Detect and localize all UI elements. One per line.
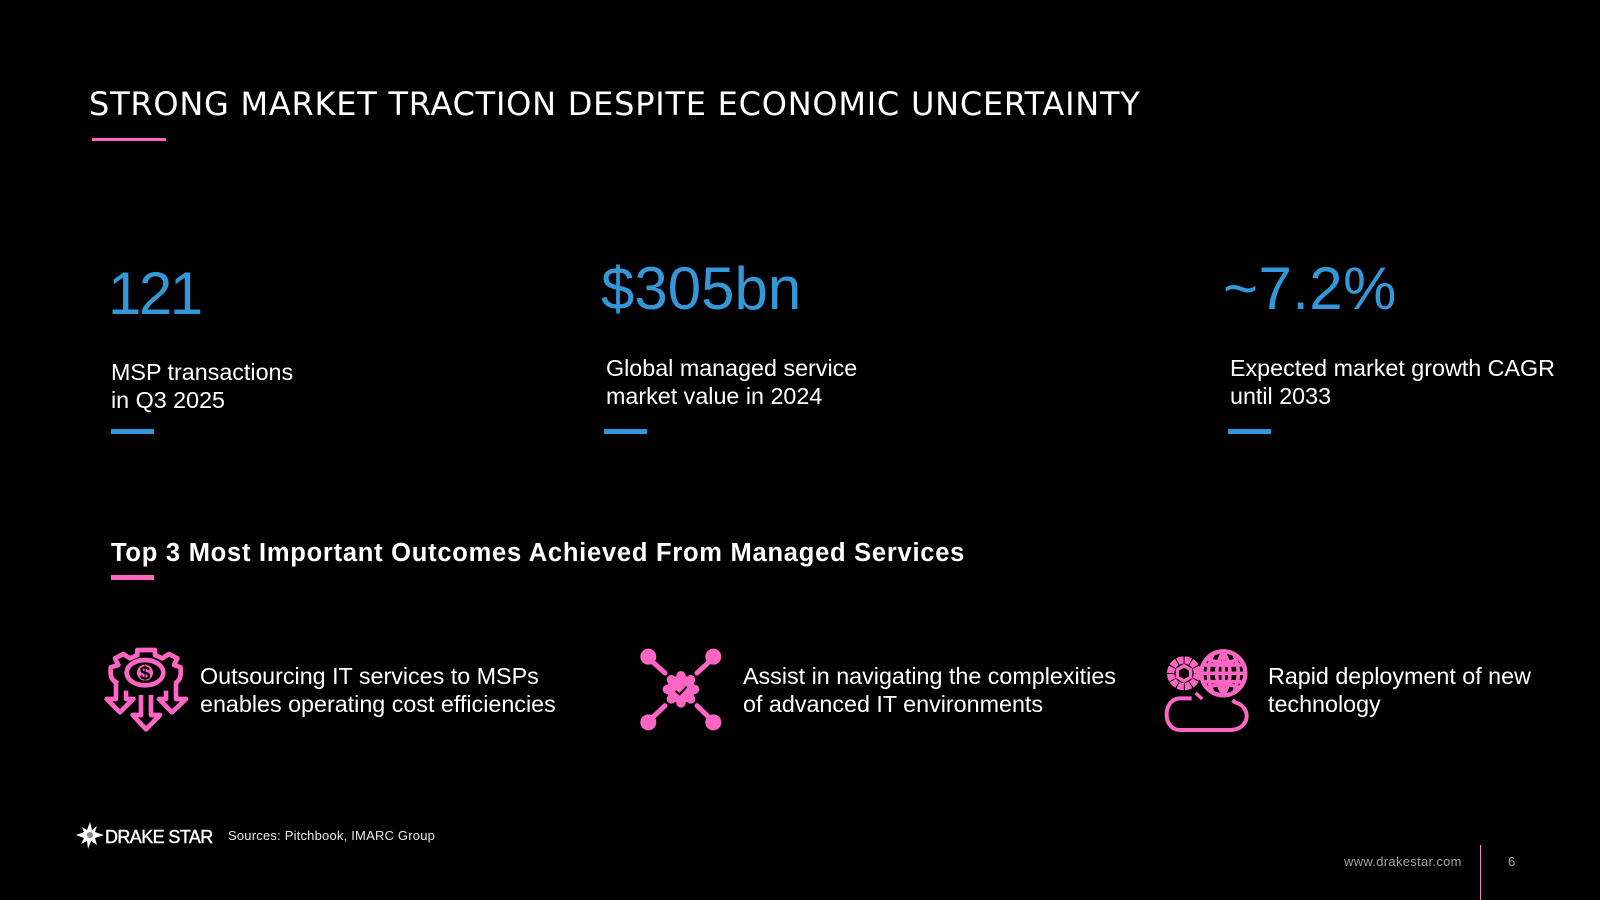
stat label: market value bbox=[606, 355, 857, 409]
outcome text 1 bbox=[200, 663, 556, 717]
icon: gear with dollar and down arrows: $ bbox=[140, 664, 151, 685]
stat label: CAGR: Expected market growth CAGR bbox=[1230, 355, 1555, 381]
outcome text 2 bbox=[743, 663, 1116, 717]
logo: Drake Star bbox=[76, 822, 213, 849]
stat accent bbox=[604, 429, 647, 434]
stat label: CAGR: until 2033 bbox=[1230, 383, 1331, 409]
outcome text 2: Assist in navigating the complexities bbox=[743, 663, 1116, 689]
logo: Drake Star: DRAKE STAR bbox=[105, 827, 213, 847]
stat: 121: 121 bbox=[108, 260, 201, 327]
outcome text 2: of advanced IT environments bbox=[743, 691, 1043, 717]
page number: 6 bbox=[1508, 854, 1515, 869]
footer divider bbox=[1480, 845, 1481, 900]
stat label: MSP transactions: MSP transactions bbox=[111, 359, 293, 385]
title underline bbox=[92, 138, 166, 141]
stat label: market value: Global managed service bbox=[606, 355, 857, 381]
stat label: CAGR bbox=[1230, 355, 1555, 409]
icon: gear with dollar and down arrows bbox=[104, 648, 188, 732]
section heading: Top 3 Most Important Outcomes Achieved From Managed Services bbox=[111, 539, 965, 567]
stat label: market value: market value in 2024 bbox=[606, 383, 822, 409]
stat accent bbox=[1228, 429, 1271, 434]
stat label: MSP transactions: in Q3 2025 bbox=[111, 387, 225, 413]
outcome text 3: Rapid deployment of new bbox=[1268, 663, 1531, 689]
website: www.drakestar.com bbox=[1344, 854, 1462, 869]
stat: $305bn: $305bn bbox=[601, 255, 801, 322]
title: STRONG MARKET TRACTION DESPITE ECONOMIC UNCERTAINTY bbox=[89, 85, 1141, 123]
icon: gear globe cloud bbox=[1164, 649, 1249, 732]
icon: network with check badge bbox=[640, 648, 722, 730]
stat: 7.2%: ~7.2% bbox=[1223, 255, 1397, 322]
outcome text 1: Outsourcing IT services to MSPs bbox=[200, 663, 539, 689]
sources: Sources: Pitchbook, IMARC Group bbox=[228, 828, 435, 843]
stat accent bbox=[111, 429, 154, 434]
outcome text 3: technology bbox=[1268, 691, 1381, 717]
outcome text 1: enables operating cost efficiencies bbox=[200, 691, 556, 717]
stat label: MSP transactions bbox=[111, 359, 293, 413]
heading accent bbox=[111, 575, 154, 580]
outcome text 3 bbox=[1268, 663, 1531, 717]
